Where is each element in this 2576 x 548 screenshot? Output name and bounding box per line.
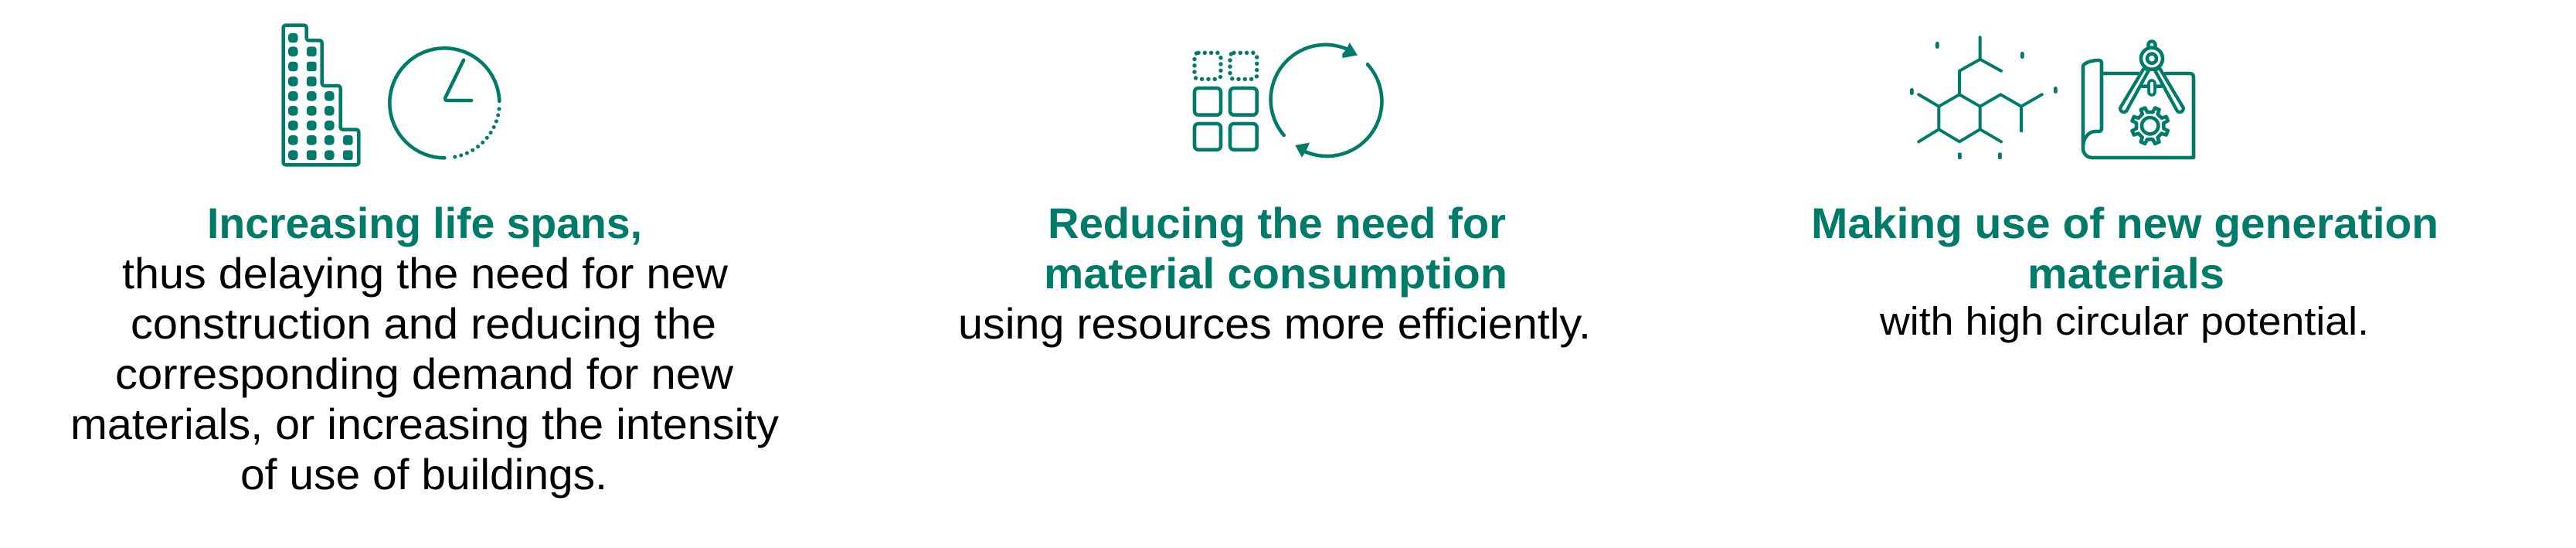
text: new generation materials (1811, 199, 2438, 343)
icon: stepped building (284, 26, 359, 165)
text: material consumption: material consumption (1044, 249, 1507, 298)
text: material consumption: using resources more efficiently. (958, 299, 1591, 348)
icon: blueprint with compass and gear (2083, 42, 2194, 158)
icon: molecule (1910, 37, 2058, 159)
text: life spans: Increasing life spans, (207, 199, 642, 247)
text: new generation materials: Making use of new generation (1811, 199, 2438, 247)
icon: clock (389, 48, 499, 158)
text: material consumption (958, 199, 1591, 348)
icon: circular arrows (1271, 43, 1381, 158)
text: new generation materials: materials (2027, 249, 2224, 298)
text: new generation materials: with high circular potential. (1879, 299, 2369, 343)
text: material consumption: Reducing the need for (1048, 199, 1506, 247)
text: life spans: thus delaying the need for new (122, 249, 729, 298)
text: life spans: corresponding demand for new (115, 349, 734, 398)
text: life spans: of use of buildings. (240, 450, 607, 499)
text: life spans: construction and reducing the (131, 299, 716, 348)
panel: reducing material need (958, 43, 1591, 348)
panel: new generation materials (1811, 37, 2438, 343)
panel: increasing life spans (70, 26, 779, 499)
text: life spans: materials, or increasing the intensity (70, 400, 779, 448)
text: life spans (70, 199, 779, 499)
icon: material grid squares (1195, 53, 1257, 150)
